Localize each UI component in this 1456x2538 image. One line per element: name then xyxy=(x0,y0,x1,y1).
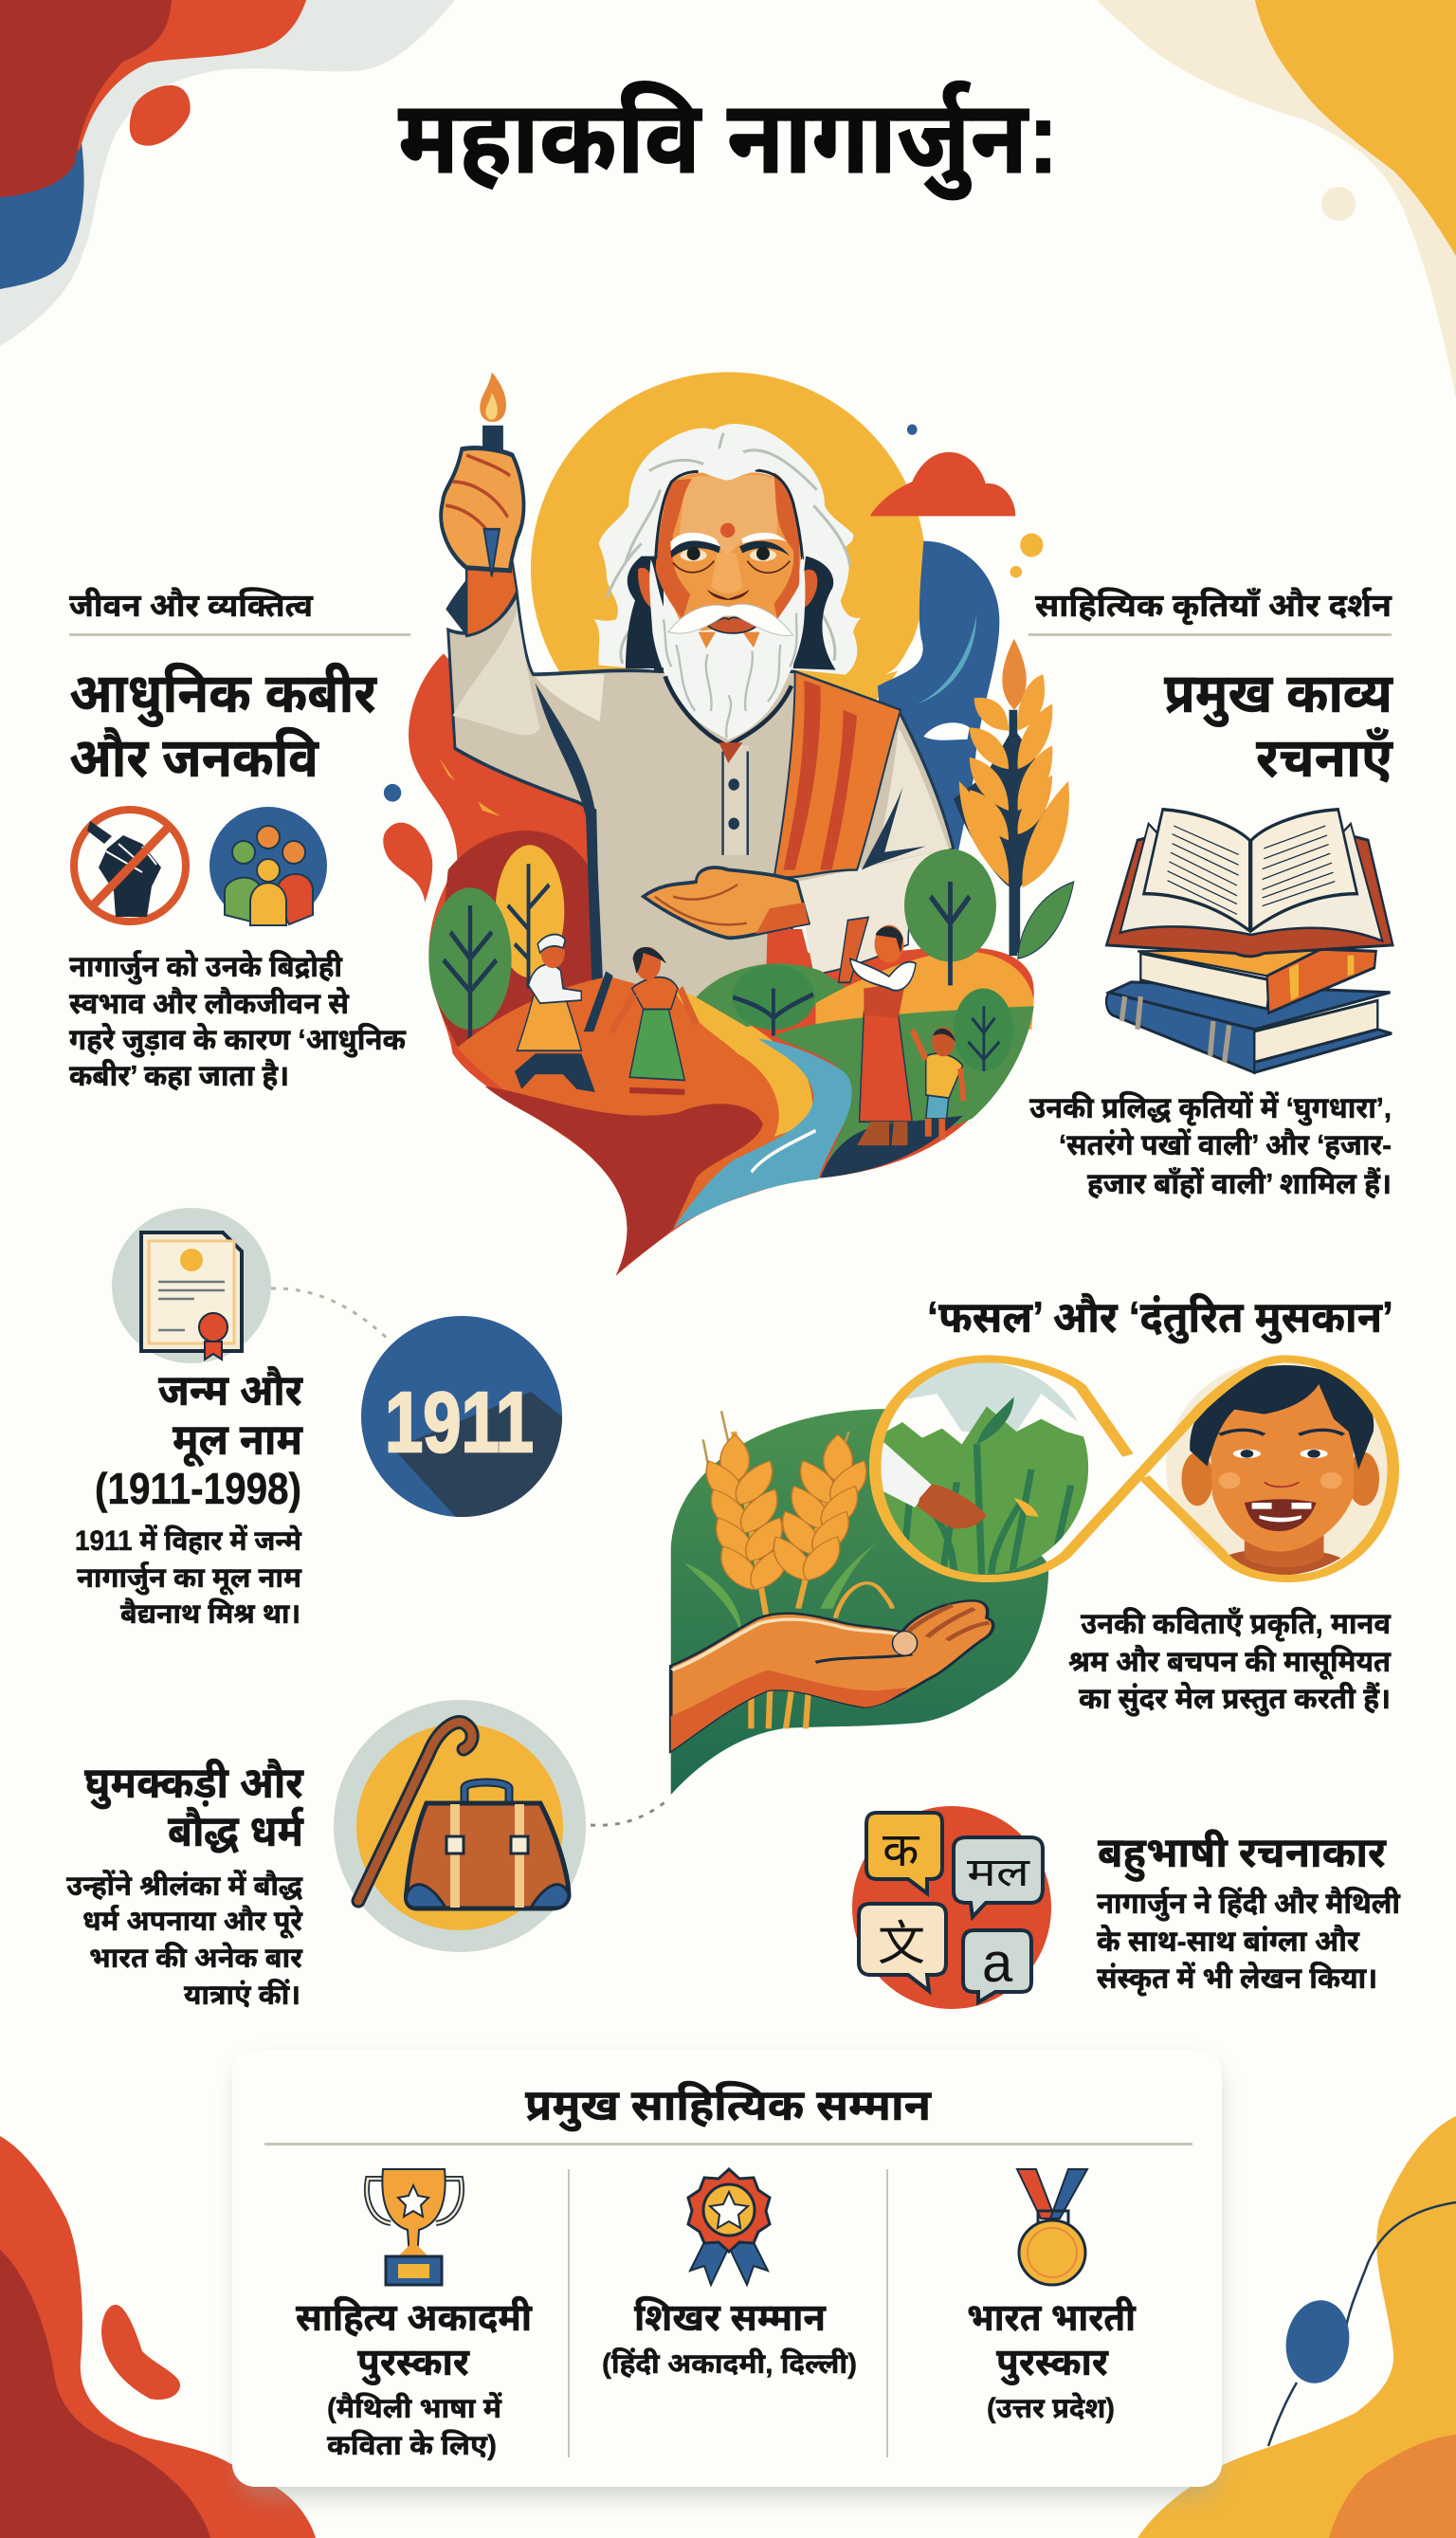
icon: speech bubbles: क xyxy=(883,1823,920,1876)
section label: साहित्यिक कृतियाँ और दर्शन xyxy=(1035,587,1392,626)
body text xyxy=(66,1869,303,2011)
nose xyxy=(711,553,742,593)
body text: ‘सतरंगे पखों वाली’ और ‘हजार- xyxy=(1059,1128,1392,1161)
award name: साहित्य अकादमी xyxy=(296,2296,533,2339)
body text: नागार्जुन को उनके बिद्रोही xyxy=(69,950,343,985)
icon: speech bubbles xyxy=(852,1806,1051,2009)
award: Bharat Bharati xyxy=(967,2169,1137,2424)
ears xyxy=(638,568,817,610)
panel: birth and original name xyxy=(75,1208,569,1630)
icon: group of people xyxy=(209,807,327,925)
body text xyxy=(1029,1091,1392,1200)
award name: पुरस्कार xyxy=(996,2342,1109,2385)
decoration: top right blobs xyxy=(1097,0,1456,398)
heading: बौद्ध धर्म xyxy=(168,1806,304,1855)
panel: harvest and smile xyxy=(671,1292,1398,1795)
forehead xyxy=(680,475,777,557)
body text: कबीर’ कहा जाता है। xyxy=(69,1059,289,1092)
body text: हजार बाँहों वाली’ शामिल हैं। xyxy=(1087,1167,1392,1200)
panel: wandering and Buddhism xyxy=(66,1700,667,2011)
child portrait xyxy=(1165,1359,1398,1580)
body text: बैद्यनाथ मिश्र था। xyxy=(120,1597,300,1630)
panel: major literary honours xyxy=(232,2050,1222,2497)
sleeve highlights xyxy=(453,609,949,1013)
body text xyxy=(1097,1887,1401,1997)
heading: जन्म और xyxy=(158,1365,303,1415)
body text: श्रम और बचपन की मासूमियत xyxy=(1068,1645,1392,1680)
body text: धर्म अपनाया और पूरे xyxy=(82,1904,303,1939)
neck line and collar xyxy=(654,670,792,746)
mouth xyxy=(708,617,756,633)
award name: (उत्तर प्रदेश) xyxy=(987,2391,1115,2424)
body text: उनकी कविताएँ प्रकृति, मानव xyxy=(1081,1607,1392,1642)
floating dots xyxy=(383,425,1043,903)
heading: ‘फसल’ और ‘दंतुरित मुसकान’ xyxy=(927,1292,1393,1343)
hairline xyxy=(656,470,803,559)
icon: medal xyxy=(1017,2169,1087,2285)
hair tuft on forehead xyxy=(699,446,758,481)
body text: का सुंदर मेल प्रस्तुत करती हैं। xyxy=(1079,1682,1391,1717)
body text: उनकी प्रलिद्ध कृतियों में ‘घुगधारा’, xyxy=(1029,1091,1392,1126)
award name: (हिंदी अकादमी, दिल्ली) xyxy=(602,2347,857,2380)
panel: multilingual writer xyxy=(852,1806,1401,2009)
body text xyxy=(69,950,407,1092)
body text: स्वभाव और लौकजीवन से xyxy=(69,987,350,1020)
kurta xyxy=(448,594,954,1013)
body text: भारत की अनेक बार xyxy=(89,1941,303,1974)
award name: भारत भारती xyxy=(967,2296,1137,2339)
orange shawl xyxy=(765,671,901,1013)
heading: बहुभाषी रचनाकार xyxy=(1098,1829,1388,1882)
body text: नागार्जुन का मूल नाम xyxy=(77,1561,301,1596)
card background xyxy=(232,2050,1222,2497)
icon: crossed-out fist xyxy=(74,810,186,922)
wheat plant xyxy=(954,639,1074,959)
title: महाकवि नागार्जुन: xyxy=(398,80,1059,201)
award name xyxy=(602,2296,857,2380)
hair xyxy=(594,424,861,675)
raised forearm and hand with pen xyxy=(441,372,523,636)
body text: उन्होंने श्रीलंका में बौद्ध xyxy=(66,1869,303,1902)
panel: literary works xyxy=(1028,587,1394,1200)
icon: speech bubbles: मल xyxy=(967,1850,1031,1894)
blue swirl xyxy=(878,541,999,852)
decoration: bottom left blobs xyxy=(0,2136,316,2538)
face xyxy=(656,472,801,632)
cupped hand xyxy=(671,1600,993,1751)
award name xyxy=(296,2296,533,2461)
icon: speech bubbles: a xyxy=(982,1932,1013,1994)
field vignette xyxy=(875,1362,1088,1577)
award: Sahitya Akademi xyxy=(296,2169,533,2461)
poet head xyxy=(594,424,861,763)
villager with stick xyxy=(515,935,611,1092)
heading: आधुनिक कबीर xyxy=(69,663,377,727)
decoration: bottom right blobs xyxy=(1138,2116,1456,2538)
chin patches xyxy=(699,632,760,648)
section label: जीवन और व्यक्तित्व xyxy=(69,588,314,624)
villager woman xyxy=(611,947,696,1092)
beard xyxy=(649,557,805,739)
year badge: 1911 xyxy=(385,1376,534,1470)
foreground landscape xyxy=(457,849,1034,1276)
eyes xyxy=(681,549,707,561)
card heading: प्रमुख साहित्यिक सम्मान xyxy=(525,2080,932,2131)
heading xyxy=(95,1365,303,1513)
hair strands xyxy=(607,433,850,664)
award name: (मैथिली भाषा में xyxy=(327,2391,502,2424)
icon: speech bubbles: 文 xyxy=(878,1906,925,1974)
icon: certificate xyxy=(112,1208,271,1363)
icon: cane and bag xyxy=(334,1700,586,1952)
body text xyxy=(1068,1607,1392,1717)
decoration: top left blobs xyxy=(0,0,455,346)
heading: (1911-1998) xyxy=(95,1464,301,1513)
illustration: field, hand and child xyxy=(671,1359,1398,1795)
open palm xyxy=(644,867,809,938)
heading: रचनाएँ xyxy=(1256,727,1394,789)
award name: पुरस्कार xyxy=(357,2342,470,2385)
beard strands xyxy=(664,613,797,738)
heading xyxy=(69,663,377,789)
body text: यात्राएं कीं। xyxy=(184,1979,300,2011)
face shadows xyxy=(656,472,799,619)
heading: घुमक्कड़ी और xyxy=(84,1758,304,1809)
body text: नागार्जुन ने हिंदी और मैथिली xyxy=(1097,1887,1401,1922)
body text xyxy=(75,1524,301,1630)
award name xyxy=(967,2296,1137,2424)
icon: stack of books xyxy=(1106,810,1392,1072)
red cloud xyxy=(870,452,1015,516)
green leaf shape xyxy=(671,1409,1048,1795)
award name: कविता के लिए) xyxy=(327,2428,497,2461)
sun disc xyxy=(531,372,926,767)
moustache xyxy=(668,604,793,635)
body text: 1911 में विहार में जन्मे xyxy=(75,1524,301,1557)
connector xyxy=(271,1288,391,1342)
infinity outline xyxy=(875,1359,1393,1579)
bindi xyxy=(720,523,735,538)
year badge xyxy=(361,1316,569,1526)
brows xyxy=(670,533,720,557)
connector xyxy=(591,1800,667,1825)
body text: के साथ-साथ बांग्ला और xyxy=(1097,1925,1360,1958)
landscape backdrop xyxy=(409,653,1034,1276)
award: Shikhar Samman xyxy=(602,2169,857,2380)
panel: life and personality xyxy=(69,588,410,1092)
child xyxy=(912,1027,964,1140)
body text: संस्कृत में भी लेखन किया। xyxy=(1097,1962,1377,1997)
central illustration: poet and landscape xyxy=(383,372,1074,1276)
award name: शिखर सम्मान xyxy=(634,2296,827,2339)
wheat stalks xyxy=(684,1411,893,1728)
heading xyxy=(1164,663,1394,789)
icon: rosette xyxy=(688,2169,770,2285)
dark hair behind neck xyxy=(626,557,836,670)
heading: और जनकवि xyxy=(69,727,319,789)
poet body xyxy=(441,372,954,1013)
heading: प्रमुख काव्य xyxy=(1164,663,1393,727)
heading: मूल नाम xyxy=(173,1415,303,1468)
heading xyxy=(84,1758,304,1855)
villager man with raised tool xyxy=(839,918,916,1145)
body text: गहरे जुड़ाव के कारण ‘आधुनिक xyxy=(69,1023,407,1058)
icon: trophy xyxy=(367,2169,462,2285)
